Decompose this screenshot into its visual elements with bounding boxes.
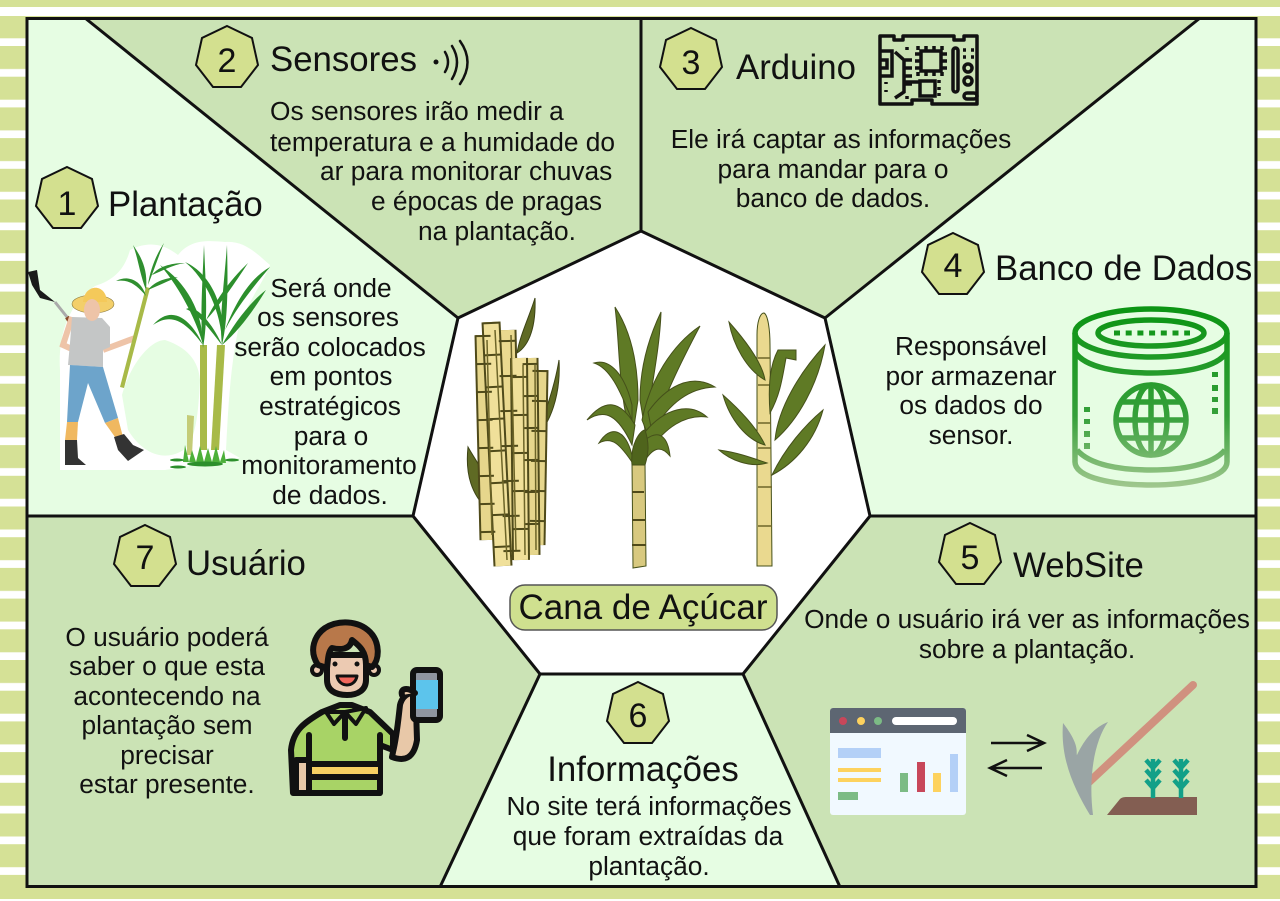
text block: Informações: que foram extraídas da	[513, 821, 784, 851]
panel: 7 Usuário background	[27, 516, 540, 887]
panel: 3 Arduino background	[641, 18, 1200, 318]
badge 2: 2	[218, 42, 236, 80]
text block: Plantação: Será onde	[270, 273, 392, 303]
text block: Arduino: para mandar para o	[718, 154, 948, 184]
icon: farmer with sugar cane	[28, 241, 270, 470]
text block: Sensores: Os sensores irão medir a	[270, 96, 564, 126]
icon: hoe and plants	[1063, 685, 1197, 815]
text block: Plantação	[234, 273, 426, 510]
text block: Plantação: em pontos	[270, 361, 392, 391]
text block: Sensores: temperatura e a humidade do	[270, 127, 615, 157]
panel: 4 Banco de Dados background	[825, 18, 1256, 516]
badge 3: 3	[682, 44, 700, 82]
label: Cana de Açúcar: Cana de Açúcar	[518, 588, 768, 627]
text block: Arduino	[671, 124, 1011, 213]
badge 1: 1	[58, 185, 76, 223]
text block: Banco de Dados: Responsável	[895, 331, 1047, 361]
text block: Usuário: O usuário poderá	[65, 622, 269, 652]
badge 5: 5	[961, 539, 979, 577]
badge 7	[114, 525, 176, 586]
badge 6	[607, 682, 669, 743]
text block: Usuário: saber o que esta	[69, 651, 265, 681]
text block: Plantação: serão colocados	[234, 332, 426, 362]
heading: Informações: Informações	[547, 750, 739, 789]
badge 1	[36, 167, 98, 228]
text block: Usuário: plantação sem	[81, 710, 253, 740]
icon: arduino board	[880, 36, 977, 104]
text block: Sensores: na plantação.	[418, 216, 576, 246]
text block: WebSite: Onde o usuário irá ver as informações	[804, 604, 1250, 634]
icon: database globe	[1075, 309, 1227, 485]
text block: Plantação: os sensores	[257, 302, 399, 332]
text block: Banco de Dados: por armazenar	[885, 361, 1057, 391]
text block: Sensores: ar para monitorar chuvas	[320, 156, 612, 186]
illustration: bundle of sugar cane	[467, 298, 559, 566]
heading: WebSite: WebSite	[1013, 546, 1144, 585]
text block: Usuário: precisar	[120, 740, 214, 770]
badge 4	[922, 233, 984, 294]
heading: Plantação: Plantação	[108, 185, 263, 224]
text block: Usuário	[65, 622, 269, 799]
text block: Sensores: e épocas de pragas	[371, 186, 602, 216]
text block: Informações: plantação.	[588, 851, 710, 881]
badge 3	[660, 28, 722, 89]
panel: 6 Informações background	[440, 674, 840, 887]
heading: Usuário: Usuário	[186, 544, 306, 583]
illustration: sugar cane plant with leaves	[587, 307, 715, 568]
text block: Sensores	[270, 96, 615, 246]
text block: Informações: No site terá informações	[506, 791, 792, 821]
heading: Banco de Dados: Banco de Dados	[995, 249, 1252, 288]
icon: dashboard window	[830, 708, 966, 815]
heading: Sensores: Sensores	[270, 40, 417, 79]
badge 5	[939, 523, 1001, 584]
text block: Usuário: estar presente.	[79, 769, 255, 799]
text block: Plantação: monitoramento	[241, 450, 417, 480]
panel: central heptagon	[413, 231, 870, 674]
text block: Banco de Dados	[885, 331, 1057, 450]
badge 6: 6	[629, 697, 647, 735]
panel: 2 Sensores background	[85, 18, 641, 318]
badge 2	[196, 26, 258, 87]
text block: Usuário: acontecendo na	[73, 681, 261, 711]
text block: WebSite	[804, 604, 1250, 664]
text block: Arduino: Ele irá captar as informações	[671, 124, 1011, 154]
icon: user with phone	[291, 622, 440, 793]
panel: 1 Plantação background	[27, 18, 458, 516]
text block: Arduino: banco de dados.	[736, 183, 930, 213]
text block: Banco de Dados: os dados do	[899, 390, 1043, 420]
panel: 5 WebSite background	[743, 516, 1256, 887]
text block: Informações	[506, 791, 792, 881]
text block: Plantação: para o	[294, 421, 368, 451]
text block: WebSite: sobre a plantação.	[919, 634, 1135, 664]
text block: Plantação: estratégicos	[259, 391, 401, 421]
icon: sensor signal	[434, 41, 468, 84]
text block: Plantação: de dados.	[272, 480, 388, 510]
badge 4: 4	[944, 247, 962, 285]
badge 7: 7	[136, 539, 154, 577]
illustration: sugar cane stalk with cut top	[719, 313, 825, 566]
heading: Arduino: Arduino	[736, 48, 856, 87]
text block: Banco de Dados: sensor.	[929, 420, 1013, 450]
arrows: data exchange	[990, 735, 1044, 776]
